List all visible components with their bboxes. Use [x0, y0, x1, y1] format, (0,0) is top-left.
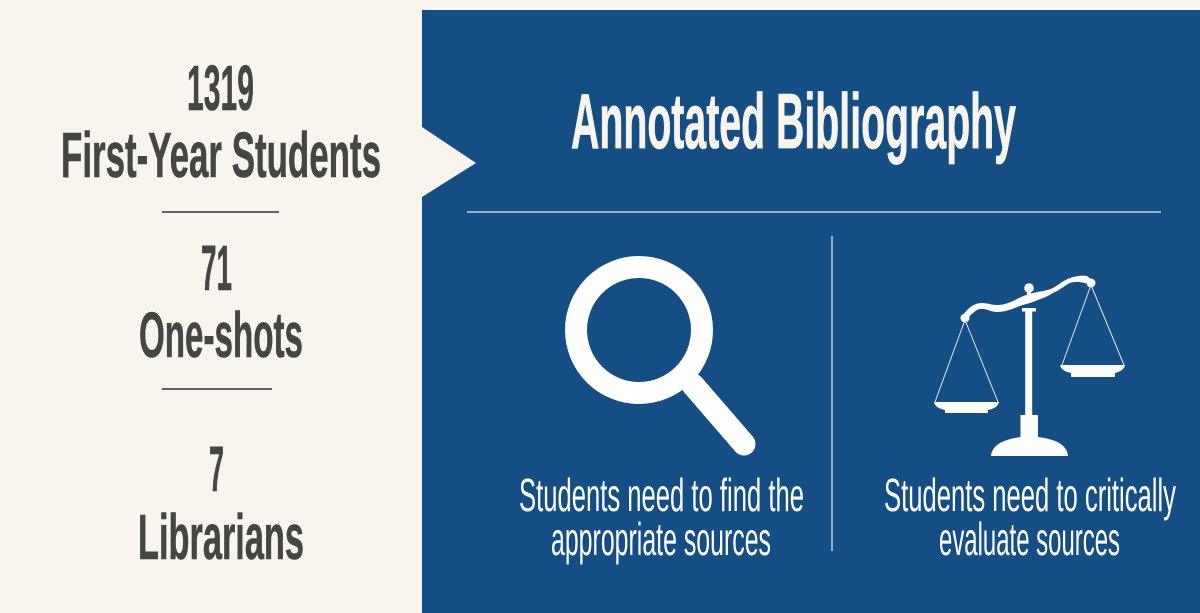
icon: magnifying glass [576, 267, 744, 444]
stat: librarians: 7 [209, 433, 224, 505]
stat: first-year students: First-Year Students [61, 119, 381, 191]
text: find sources: appropriate sources [551, 513, 771, 565]
stat: one-shots: One-shots [139, 299, 303, 371]
stat: librarians: Librarians [138, 501, 304, 573]
stat: one-shots [139, 232, 303, 371]
text: find sources: Students need to find the [519, 469, 804, 521]
stat: first-year students: 1319 [187, 52, 254, 124]
stat: one-shots: 71 [201, 232, 232, 304]
panel: annotated bibliography [422, 10, 1200, 613]
icon: scales [934, 276, 1125, 456]
text: find sources [519, 469, 804, 565]
text: evaluate sources [884, 469, 1176, 565]
stat: librarians [138, 433, 304, 573]
stat: first-year students [61, 52, 381, 191]
panel: statistics [61, 52, 381, 573]
